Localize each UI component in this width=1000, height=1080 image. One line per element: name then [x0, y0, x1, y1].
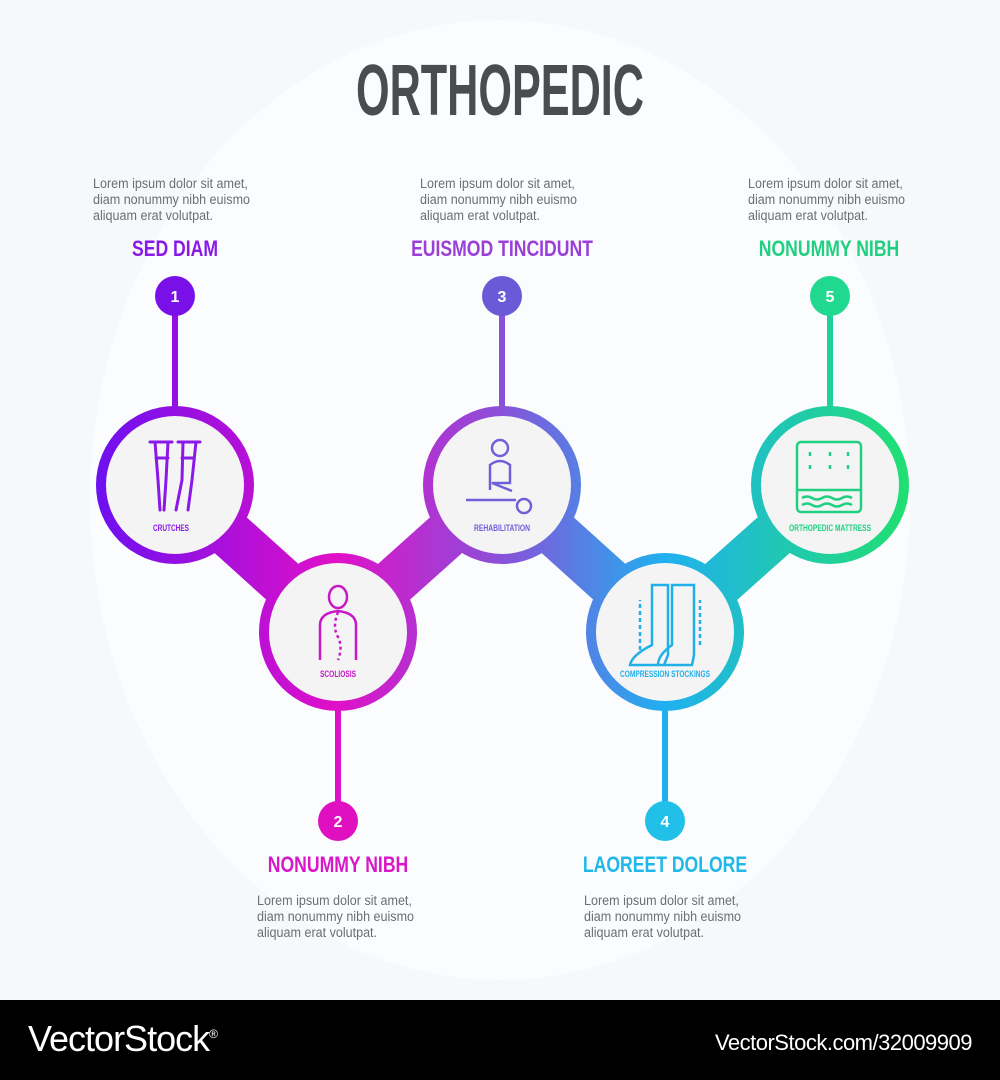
text block 3: diam nonummy nibh euismo	[420, 192, 577, 207]
text block 4: diam nonummy nibh euismo	[584, 909, 741, 924]
text block 2: aliquam erat volutpat.	[257, 925, 377, 940]
pins: 1	[171, 289, 180, 306]
text block 1: diam nonummy nibh euismo	[93, 192, 250, 207]
icon labels: REHABILITATION	[474, 523, 530, 533]
heading 4: LAOREET DOLORE	[583, 852, 747, 877]
heading 2: NONUMMY NIBH	[268, 852, 408, 877]
text block 5: aliquam erat volutpat.	[748, 208, 868, 223]
icon labels	[153, 523, 871, 679]
text block 5	[748, 176, 905, 223]
text block 3: Lorem ipsum dolor sit amet,	[420, 176, 575, 191]
heading 1: SED DIAM	[132, 236, 218, 261]
icon labels: SCOLIOSIS	[320, 669, 356, 679]
icon labels: COMPRESSION STOCKINGS	[620, 669, 710, 679]
text block 1: aliquam erat volutpat.	[93, 208, 213, 223]
icon labels: CRUTCHES	[153, 523, 189, 533]
text block 4: aliquam erat volutpat.	[584, 925, 704, 940]
text block 2: Lorem ipsum dolor sit amet,	[257, 893, 412, 908]
pins: 3	[498, 289, 507, 306]
text block 5: diam nonummy nibh euismo	[748, 192, 905, 207]
icon: scoliosis	[320, 586, 356, 660]
pins: 5	[826, 289, 835, 306]
heading 5: NONUMMY NIBH	[759, 236, 899, 261]
heading 3: EUISMOD TINCIDUNT	[411, 236, 593, 261]
text block 4: Lorem ipsum dolor sit amet,	[584, 893, 739, 908]
text block 1: Lorem ipsum dolor sit amet,	[93, 176, 248, 191]
pins: 4	[661, 814, 670, 831]
title: ORTHOPEDIC	[356, 51, 644, 131]
background circle	[90, 20, 910, 980]
text block 4	[584, 893, 741, 940]
text block 3	[420, 176, 577, 223]
pins: 2	[334, 814, 343, 831]
icon: mattress	[797, 442, 861, 512]
icon: crutches	[150, 442, 200, 510]
text block 2	[257, 893, 414, 940]
footer	[0, 1000, 1000, 1080]
text block 1	[93, 176, 250, 223]
footer: VectorStock.com/32009909	[715, 1030, 972, 1055]
text block 5: Lorem ipsum dolor sit amet,	[748, 176, 903, 191]
text block 2: diam nonummy nibh euismo	[257, 909, 414, 924]
icon labels: ORTHOPEDIC MATTRESS	[789, 523, 871, 533]
footer: VectorStock®	[28, 1018, 217, 1059]
icon: rehabilitation	[466, 440, 531, 513]
text block 3: aliquam erat volutpat.	[420, 208, 540, 223]
icon: stockings	[630, 585, 700, 665]
pins	[155, 276, 850, 841]
